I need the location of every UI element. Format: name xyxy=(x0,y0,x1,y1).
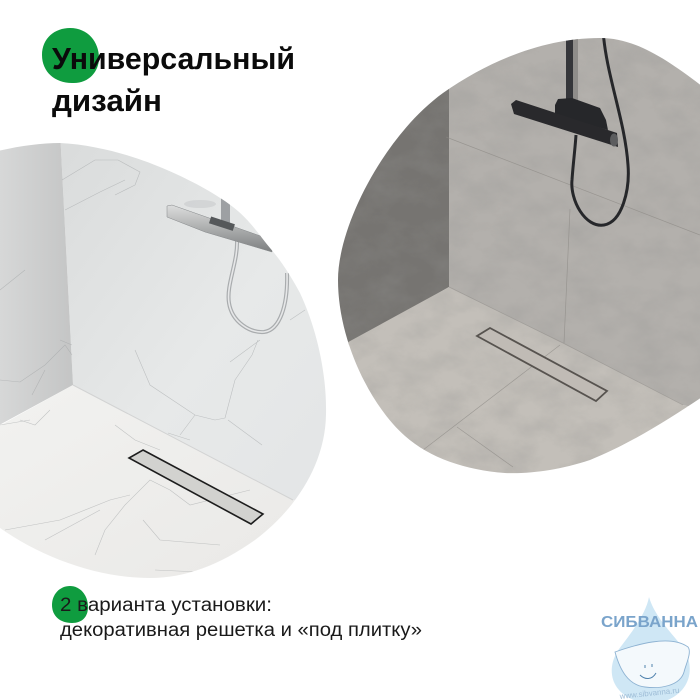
hose highlight xyxy=(229,240,287,332)
title blob xyxy=(42,28,99,83)
logo drop xyxy=(612,597,690,700)
marble veins xyxy=(0,160,305,572)
back wall xyxy=(449,30,700,412)
hose xyxy=(229,240,287,332)
white drain xyxy=(129,450,263,524)
title: Универсальный xyxy=(52,41,295,76)
thermostat bar xyxy=(167,205,272,252)
tile seams xyxy=(423,137,700,467)
wall mount shadow xyxy=(184,200,216,208)
photo: gray concrete shower xyxy=(330,30,700,490)
title: дизайн xyxy=(52,83,162,118)
photo: white marble shower xyxy=(0,130,340,590)
logo: Сибванна xyxy=(601,597,698,700)
caption: декоративная решетка и «под плитку» xyxy=(60,620,422,641)
marble floor xyxy=(0,386,294,578)
concrete floor xyxy=(348,287,688,474)
riser pipe xyxy=(221,198,230,223)
back marble wall xyxy=(60,143,326,500)
side wall xyxy=(0,130,73,430)
logo wordmark: СИБВАННА xyxy=(601,614,698,631)
logo face xyxy=(640,664,656,679)
black riser pipe xyxy=(566,39,578,100)
white shower mixer xyxy=(167,198,287,332)
caption blob xyxy=(52,586,88,623)
side wall xyxy=(338,89,449,344)
black hose xyxy=(572,30,628,225)
concrete drain xyxy=(477,328,607,401)
caption: 2 варианта установки: xyxy=(60,595,272,616)
black thermostat xyxy=(511,98,618,147)
logo bathtub xyxy=(615,641,689,688)
thermostat detail xyxy=(209,217,235,231)
floor shadow edge xyxy=(73,385,293,500)
concrete mottling xyxy=(358,98,614,473)
